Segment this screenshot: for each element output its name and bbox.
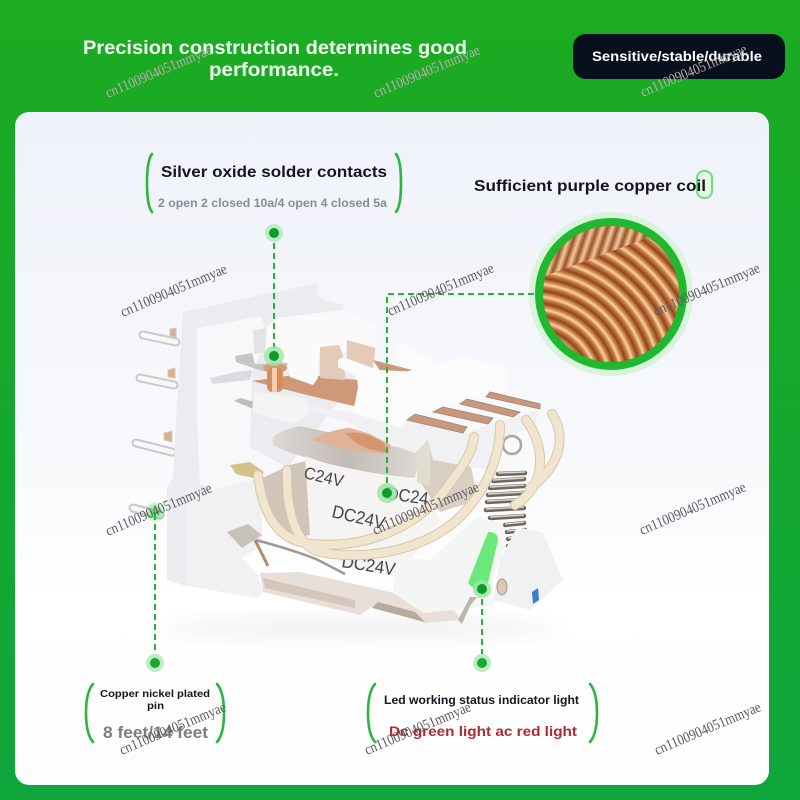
pill badge [573, 34, 785, 79]
relay shadow [160, 618, 560, 638]
wire cavity [258, 460, 310, 540]
title [83, 37, 467, 81]
watermarks [103, 41, 764, 759]
watermarks: cn1100904051mmyae [117, 699, 229, 759]
callout: silver oxide solder contacts [147, 154, 401, 212]
callout: silver oxide solder contacts: 2 open 2 closed 10a/4 open 4 closed 5a [158, 196, 387, 210]
watermarks: cn1100904051mmyae [362, 699, 474, 759]
callout: copper nickel plated pin [86, 684, 224, 742]
callout: copper nickel plated pin: pin [147, 700, 164, 712]
callout: copper nickel plated pin: 8 feet/14 feet [103, 723, 208, 742]
white latch and tray [310, 343, 540, 470]
callout: LED indicator light: Led working status indicator light [384, 695, 579, 707]
coil body [302, 440, 478, 579]
callout: LED indicator light: Dc green light ac red light [389, 723, 577, 739]
watermarks: cn1100904051mmyae [371, 42, 483, 102]
callout: silver oxide solder contacts: Silver oxide solder contacts [161, 164, 387, 181]
contacts [234, 353, 288, 416]
copper strip [252, 374, 358, 407]
right cap [493, 527, 563, 610]
copper terminals [407, 392, 540, 433]
leader line: pin [144, 501, 166, 672]
leader line: LED [473, 580, 491, 672]
coil tan interior [415, 445, 478, 512]
white panel [15, 112, 769, 785]
white top block [265, 310, 376, 385]
callout: copper nickel plated pin: Copper nickel plated [100, 688, 210, 700]
pill badge: Sensitive/stable/durable [592, 48, 762, 64]
coil body: DC24V [340, 551, 397, 579]
watermarks: cn1100904051mmyae [370, 479, 482, 539]
watermarks: cn1100904051mmyae [103, 42, 215, 102]
coil body: DC24 [385, 483, 430, 509]
callout: LED indicator light [368, 684, 597, 742]
watermarks: cn1100904051mmyae [385, 260, 497, 320]
copper coil magnifier [529, 212, 693, 376]
coil body: C24V [302, 463, 346, 491]
relay illustration [133, 283, 563, 624]
leader line: contacts [264, 224, 284, 366]
watermarks: cn1100904051mmyae [637, 479, 749, 539]
LED indicator [468, 532, 498, 593]
relay pins [133, 328, 176, 515]
relay frame [167, 283, 376, 598]
watermarks: cn1100904051mmyae [103, 480, 215, 540]
title: performance. [209, 59, 339, 81]
spring [486, 436, 525, 553]
callout: sufficient purple copper coil: Sufficient purple copper coil [474, 178, 706, 195]
watermarks: cn1100904051mmyae [118, 261, 230, 321]
callout: sufficient purple copper coil [474, 171, 712, 198]
coil bobbin [273, 426, 420, 478]
coil body: DC24V [330, 501, 387, 533]
watermarks: cn1100904051mmyae [638, 41, 750, 101]
watermarks: cn1100904051mmyae [652, 699, 764, 759]
clear base and lead [227, 462, 462, 623]
leader line: coil [377, 294, 540, 503]
white plate under contacts [252, 392, 310, 424]
wires [258, 414, 560, 555]
LED housing [393, 517, 505, 624]
watermarks: cn1100904051mmyae [651, 260, 763, 320]
title: Precision construction determines good [83, 37, 467, 59]
